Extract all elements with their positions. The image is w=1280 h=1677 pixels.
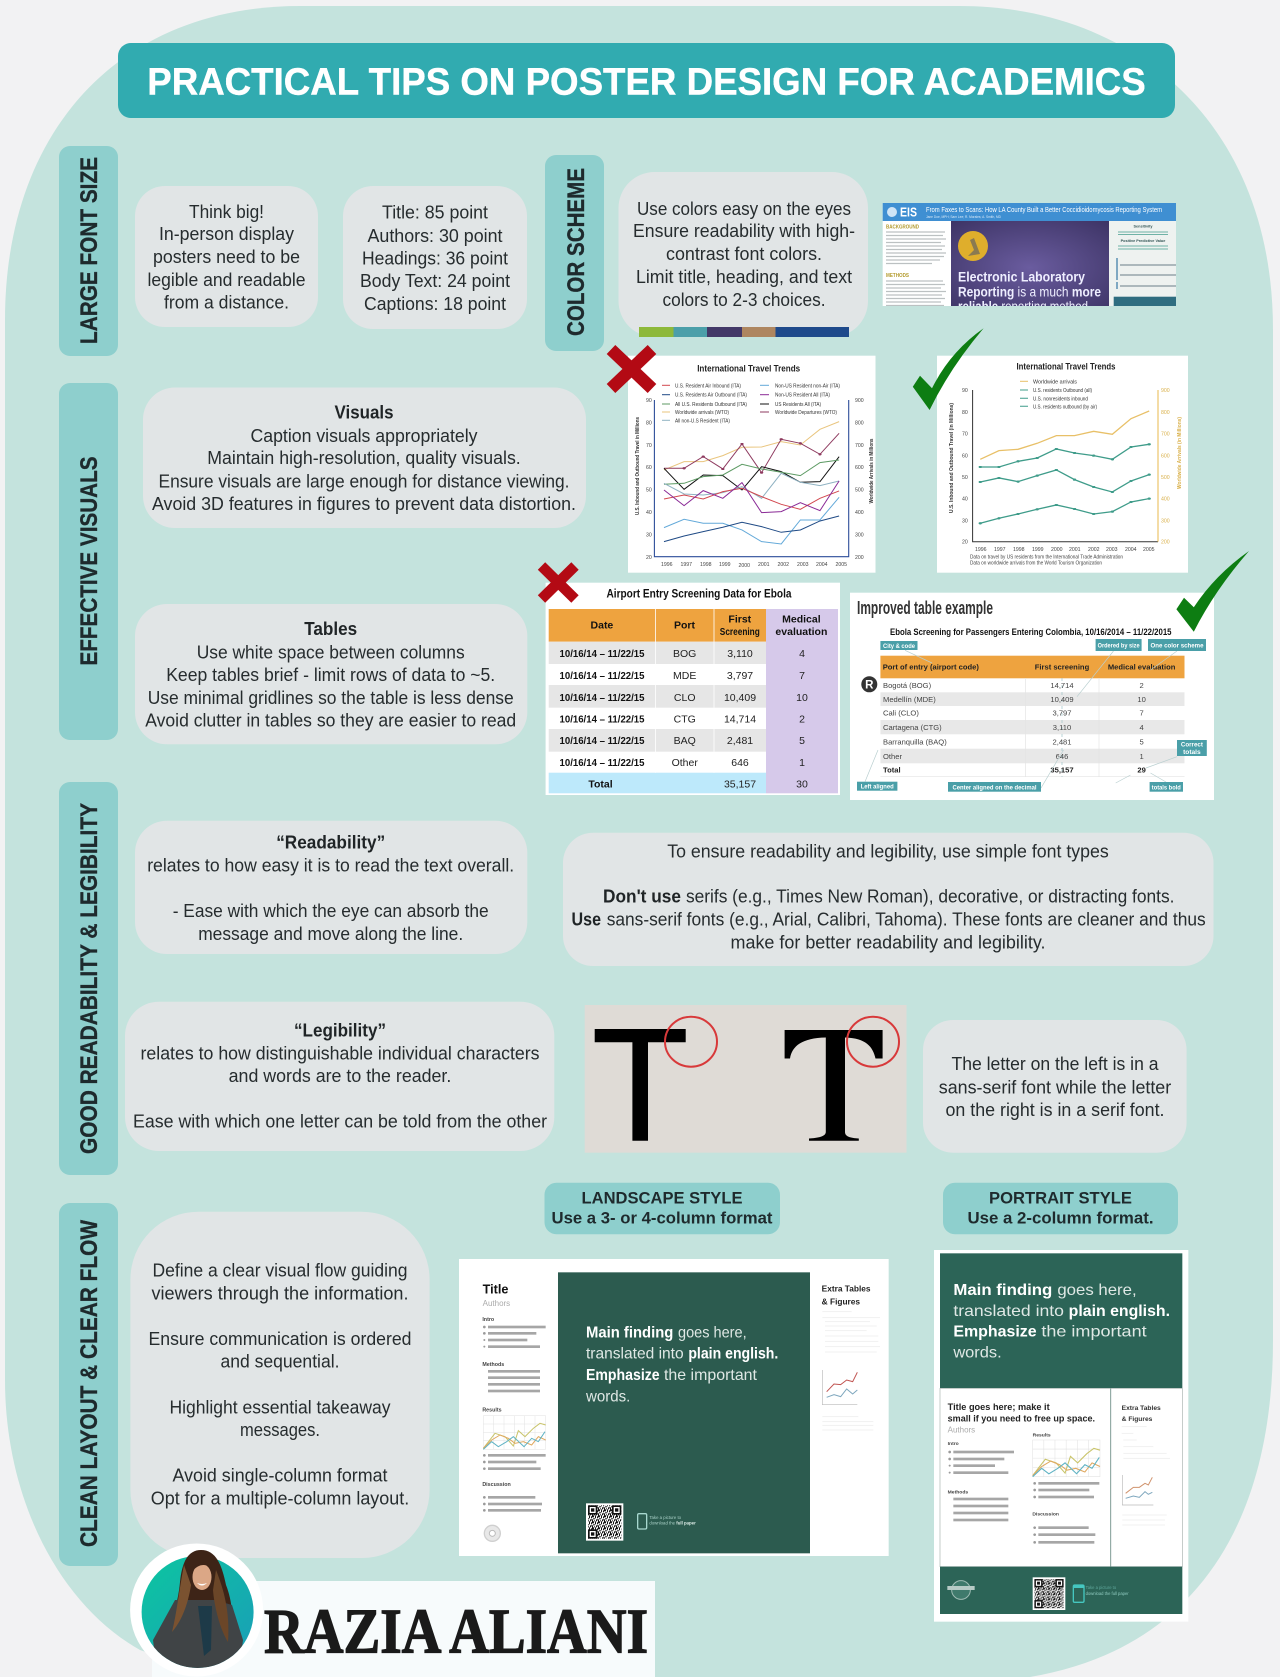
poster template: portrait [934,1250,1188,1622]
table: poor example: 3,797 [727,670,753,682]
table: improved example: Port of entry (airport code) [883,662,979,672]
panel: tables: Use white space between columns [197,641,465,662]
section tab: clean layout: CLEAN LAYOUT & CLEAR FLOW [76,1220,103,1547]
chart: cluttered line chart: 2001 [758,562,770,568]
chart: improved line chart: 2002 [1088,547,1100,553]
poster template: landscape: the important [664,1367,758,1384]
poster template: portrait: Intro [948,1441,959,1447]
panel: font advice: Don't use [603,886,681,907]
chart: improved line chart: 90 [962,388,968,394]
panel: tables [135,604,527,744]
panel: visuals: Ensure visuals are large enough for distance viewing. [158,470,570,492]
poster template: portrait: small if you need to free up space. [948,1413,1095,1423]
table: improved example: City & code [883,643,915,650]
panel: color advice: colors to 2-3 choices. [662,289,826,310]
table: poor example: 30 [796,778,808,790]
panel: point sizes: Headings: 36 point [362,247,509,268]
chart: cluttered line chart: 800 [855,420,864,426]
chart: cluttered line chart: U.S. Resident Air Inbound (ITA) [675,383,741,389]
panel: point sizes: Authors: 30 point [368,225,503,246]
poster template: portrait: & Figures [1122,1416,1153,1423]
chart: improved line chart: 600 [1161,453,1170,459]
panel: layout advice: Opt for a multiple-column layout. [151,1487,409,1508]
table: improved example: Center aligned on the decimal [952,784,1037,791]
chart: cluttered line chart: Worldwide arrivals (WTO) [675,410,729,416]
chart: cluttered line chart: 70 [646,443,652,449]
section tab: effective visuals: EFFECTIVE VISUALS [76,456,103,666]
chart: cluttered line chart: Non-US Resident All (ITA) [775,393,830,399]
chart: cluttered line chart: Non-US Resident non-Air (ITA) [775,383,840,389]
table: improved example: totals [1183,749,1201,756]
panel: letter caption [923,1020,1187,1153]
chart: cluttered line chart: 30 [646,532,652,538]
poster template: portrait: Discussion [1032,1511,1059,1517]
poster template: portrait: Take a picture to [1086,1585,1117,1590]
chart: improved line chart: 500 [1161,475,1170,481]
chart: improved line chart: Worldwide arrivals [1033,379,1078,385]
chart: cluttered line chart: All U.S. Residents Outbound (ITA) [675,402,747,408]
table: improved example: One color scheme [1150,642,1204,650]
table: improved example: 14,714 [1050,681,1074,690]
icon: green check [1176,551,1249,632]
panel: layout advice: Avoid single-column format [172,1465,388,1486]
panel: tables: Tables [304,618,357,639]
chart: cluttered line chart: 20 [646,555,652,561]
chart: improved line chart: 900 [1161,388,1170,394]
poster template: landscape: Title [483,1282,508,1296]
panel: font advice [563,833,1214,966]
example poster thumbnail: BACKGROUND [886,224,919,230]
table: improved example: 7 [1139,708,1144,718]
table: poor example: 14,714 [724,714,756,726]
poster template: landscape [459,1259,889,1556]
panel: layout advice: viewers through the information. [152,1282,408,1303]
table: poor example: 7 [799,670,805,682]
author portrait [130,1544,256,1668]
chart: improved line chart: U.S. nonresidents inbound [1033,396,1088,402]
panel: think big [135,186,318,327]
panel: tables: Avoid clutter in tables so they are easier to read [145,710,516,731]
poster template: landscape: Authors [483,1299,510,1308]
chart: cluttered line chart: 300 [855,532,864,538]
poster template: landscape: & Figures [822,1297,860,1307]
chart: improved line chart: 300 [1161,518,1170,524]
icon: green check [913,328,984,410]
chart: cluttered line chart: 600 [855,465,864,471]
panel: font advice: serifs (e.g., Times New Roman), decorative, or distracting fonts. [686,886,1174,907]
table: improved example: 3,110 [1053,723,1071,732]
example poster thumbnail [883,203,1176,314]
table: poor example: Other [672,757,698,769]
table: improved example: 1 [1139,752,1144,761]
panel: point sizes: Captions: 18 point [364,293,507,314]
panel: font advice: sans-serif fonts (e.g., Arial, Calibri, Tahoma). These fonts are cleaner and thus [607,908,1206,929]
panel: legibility: relates to how distinguishable individual characters [140,1042,540,1063]
table: improved example: Left aligned [861,784,894,791]
example poster thumbnail: EIS [900,204,917,220]
panel: readability: relates to how easy it is to read the text overall. [147,855,514,876]
poster template: portrait: the important [1041,1324,1147,1341]
panel: readability: message and move along the line. [198,923,463,944]
table: poor example: 2 [799,714,805,726]
table: improved example: First screening [1035,662,1090,672]
chart: improved line chart: 2004 [1125,547,1137,553]
chart: cluttered line chart: 2003 [797,562,809,568]
poster template: portrait: words. [952,1344,1002,1361]
poster template: landscape: Main finding [586,1324,673,1341]
poster template: landscape: Discussion [482,1482,511,1488]
chart: cluttered line chart: 2000 [738,563,750,569]
chart: cluttered line chart: 2002 [778,562,789,568]
table: improved example: Medellín (MDE) [883,695,936,704]
table: poor example [546,583,840,795]
panel: point sizes: Title: 85 point [382,202,489,222]
table: improved example: 646 [1056,752,1068,761]
table: improved example: Barranquilla (BAQ) [883,738,947,746]
poster template: landscape: Extra Tables [822,1284,871,1294]
table: improved example: Ordered by size [1098,642,1140,650]
table: poor example: 4 [799,648,805,660]
table: improved example: 29 [1137,766,1146,774]
section tab: large font size [59,146,118,356]
table: improved example: 2,481 [1052,738,1072,746]
table: poor example: 1 [799,757,805,769]
panel: think big: from a distance. [164,292,289,312]
panel: color advice: Limit title, heading, and text [636,266,853,287]
table: poor example: 10/16/14 – 11/22/15 [560,757,645,769]
table: poor example: Airport Entry Screening Data for Ebola [606,588,792,600]
section tab: clean layout [59,1203,118,1566]
panel: readability: - Ease with which the eye can absorb the [173,900,489,921]
chart: improved line chart: 60 [962,453,968,459]
chart: cluttered line chart [628,356,876,573]
poster template: landscape: Methods [482,1362,504,1368]
panel: legibility: and words are to the reader. [229,1065,451,1086]
panel: readability: “Readability” [276,831,385,852]
chart: cluttered line chart: 2004 [816,562,828,568]
panel: think big: posters need to be [153,246,300,267]
color palette strip [639,327,849,337]
section tab: effective visuals [59,383,118,740]
chart: cluttered line chart: 500 [855,488,864,494]
table: poor example: Medical [782,614,821,626]
section tab: color scheme [545,155,604,351]
table: poor example: 10/16/14 – 11/22/15 [560,648,645,660]
heading: portrait style [943,1183,1178,1234]
chart: improved line chart: 20 [962,540,968,546]
heading: landscape style: Use a 3- or 4-column format [552,1208,773,1227]
poster template: portrait: download the full paper [1086,1591,1129,1596]
table: poor example: BOG [673,648,696,660]
table: poor example: 10/16/14 – 11/22/15 [560,735,645,747]
poster template: portrait: Methods [948,1489,968,1495]
chart: cluttered line chart: 1996 [661,562,673,568]
chart: cluttered line chart: 900 [855,398,864,404]
example poster thumbnail: reliable reporting method [958,298,1088,314]
heading: landscape style: LANDSCAPE STYLE [582,1188,742,1207]
chart: cluttered line chart: All non-U.S Resident (ITA) [675,418,730,424]
panel: think big: legible and readable [148,269,306,290]
chart: improved line chart: 30 [962,518,968,524]
table: improved example: Bogotá (BOG) [883,681,932,690]
chart: improved line chart: 50 [962,475,968,481]
panel: font advice: To ensure readability and legibility, use simple font types [667,840,1109,861]
chart: improved line chart: 1999 [1032,547,1044,553]
chart: cluttered line chart: U.S. Residents Air Outbound (ITA) [675,393,747,399]
panel: point sizes: Body Text: 24 point [360,270,511,291]
chart: improved line chart: International Travel Trends [1016,362,1116,372]
heading: portrait style: Use a 2-column format. [968,1208,1154,1227]
panel: layout advice: and sequential. [220,1351,340,1372]
table: improved example: R [865,680,874,692]
table: poor example: BAQ [674,735,696,747]
chart: cluttered line chart: 50 [646,488,652,494]
table: improved example: Ebola Screening for Passengers Entering Colombia, 10/16/2014 – 11/22/2015 [890,627,1172,638]
table: poor example: Total [588,778,613,790]
chart: improved line chart: 2000 [1051,547,1063,553]
table: poor example: CTG [674,714,696,726]
table: improved example: 5 [1139,738,1144,746]
table: improved example: 2 [1139,681,1144,690]
table: poor example: 10/16/14 – 11/22/15 [560,670,645,682]
chart: cluttered line chart: 40 [646,510,652,516]
panel: readability [135,821,527,954]
chart: improved line chart: 2005 [1143,547,1155,553]
panel: think big: In-person display [159,223,295,244]
panel: layout advice: Highlight essential takeaway [170,1396,391,1417]
table: poor example: 3,110 [727,648,753,660]
example poster thumbnail: Electronic Laboratory [958,268,1085,284]
poster template: portrait: Authors [948,1426,975,1435]
panel: visuals [143,388,586,528]
chart: improved line chart: U.S. residents Outbound (all) [1033,388,1092,394]
table: poor example: 2,481 [727,735,753,747]
chart: cluttered line chart: Worldwide Departures (WTO) [775,410,837,416]
chart: cluttered line chart: International Travel Trends [697,364,800,374]
chart: cluttered line chart: US Residents All (ITA) [775,402,821,408]
table: improved example: 4 [1139,723,1144,732]
chart: improved line chart: 2003 [1106,547,1118,553]
poster template: portrait: Emphasize [953,1324,1037,1341]
table: poor example: Port [674,620,696,632]
table: improved example: 10,409 [1050,695,1074,704]
section tab: readability and legibility: GOOD READABILITY & LEGIBILITY [76,803,103,1154]
poster template: portrait: Main finding [953,1282,1052,1299]
chart: cluttered line chart: 1997 [680,562,692,568]
table: poor example: 35,157 [724,778,756,790]
example poster thumbnail: Reporting is a much more [958,284,1101,300]
panel: layout advice: messages. [240,1419,320,1440]
example poster thumbnail: METHODS [886,273,909,279]
table: poor example: Screening [720,626,760,638]
chart: improved line chart: 1996 [975,547,987,553]
poster template: landscape: Results [482,1408,502,1414]
example poster thumbnail: Positive Predictive Value [1121,239,1165,243]
chart: improved line chart: U.S. residents outbound (by air) [1033,404,1097,410]
table: poor example: 10/16/14 – 11/22/15 [560,714,645,726]
poster template: portrait: Results [1033,1433,1051,1439]
poster template: portrait: Extra Tables [1122,1405,1161,1412]
panel: color advice: Use colors easy on the eyes [637,198,851,219]
table: improved example: Improved table example [857,598,993,618]
poster template: landscape: Intro [482,1317,495,1323]
section tab: readability and legibility [59,782,118,1175]
panel: font advice: Use [572,908,601,929]
chart: cluttered line chart: 200 [855,555,864,561]
panel: color advice [618,172,868,337]
author name banner [152,1581,655,1677]
chart: cluttered line chart: 80 [646,420,652,426]
chart: improved line chart: 400 [1161,497,1170,503]
icon: red cross [542,566,575,599]
table: improved example: Medical evaluation [1108,662,1176,672]
poster template: landscape: translated into [586,1346,684,1363]
chart: improved line chart: 800 [1161,410,1170,416]
chart: cluttered line chart: 60 [646,465,652,471]
table: improved example: totals bold [1152,784,1181,791]
table: poor example: 646 [731,757,749,769]
panel: tables: Keep tables brief - limit rows of data to ~5. [166,664,495,685]
table: improved example: 35,157 [1050,766,1074,774]
table: improved example: Cali (CLO) [883,708,919,718]
chart: cluttered line chart: 1998 [700,562,712,568]
panel: layout advice: Define a clear visual flow guiding [152,1260,408,1281]
chart: improved line chart: 2001 [1069,547,1081,553]
table: poor example: Date [591,620,613,632]
panel: tables: Use minimal gridlines so the table is less dense [148,687,514,708]
panel: layout advice [130,1212,430,1558]
chart: improved line chart: Data on worldwide arrivals from the World Tourism Organization [970,560,1102,566]
poster template: landscape: Take a picture to [649,1515,682,1520]
panel: layout advice: Ensure communication is ordered [148,1328,412,1349]
panel: visuals: Visuals [334,402,394,422]
poster template: portrait: translated into [953,1303,1064,1320]
chart: cluttered line chart: Worldwide Arrivals in Millions [869,438,875,504]
chart: improved line chart: 200 [1161,540,1170,546]
section tab: color scheme: COLOR SCHEME [563,168,590,336]
chart: improved line chart: Data on travel by US residents from the International Trade Administration [970,554,1123,560]
poster template: landscape: Emphasize [586,1367,660,1384]
chart: improved line chart: Worldwide Arrivals (in Millions) [1177,417,1183,489]
heading: portrait style: PORTRAIT STYLE [989,1188,1132,1207]
chart: improved line chart: 700 [1161,432,1170,438]
chart: cluttered line chart: 400 [855,510,864,516]
chart: improved line chart: U.S. Inbound and Outbound Travel (in Millions) [949,403,955,513]
table: improved example: Total [883,766,901,774]
chart: cluttered line chart: 1999 [719,562,731,568]
example poster thumbnail: From Faxes to Scans: How LA County Built a Better Coccidioidomycosis Reporting System [926,205,1162,214]
panel: think big: Think big! [189,201,264,222]
table: poor example: 10 [796,692,808,704]
panel: letter caption: sans-serif font while the letter [939,1076,1171,1097]
icon: red cross [611,350,652,388]
table: improved example: 3,797 [1052,708,1072,718]
panel: color advice: contrast font colors. [666,243,822,264]
table: improved example [850,593,1214,800]
table: poor example: evaluation [775,626,827,638]
chart: cluttered line chart: U.S. Inbound and Outbound Travel in Millions [635,417,641,515]
chart: cluttered line chart: 90 [646,398,652,404]
chart: improved line chart: 40 [962,497,968,503]
panel: legibility: “Legibility” [294,1020,386,1041]
panel: visuals: Maintain high-resolution, quality visuals. [207,447,521,468]
chart: cluttered line chart: 700 [855,443,864,449]
panel: visuals: Avoid 3D features in figures to prevent data distortion. [152,493,576,514]
table: poor example: First [728,614,752,626]
chart: improved line chart: 1997 [994,547,1006,553]
table: poor example: 10,409 [724,692,756,704]
panel: color advice: Ensure readability with high- [633,220,855,241]
chart: improved line chart: 70 [962,432,968,438]
table: improved example: Other [883,752,902,761]
chart: improved line chart: 1998 [1013,547,1025,553]
poster template: landscape: words. [585,1388,630,1405]
chart: cluttered line chart: 2005 [836,562,847,568]
table: poor example: 5 [799,735,805,747]
panel: visuals: Caption visuals appropriately [250,425,478,446]
poster template: landscape: plain english. [688,1346,778,1363]
table: improved example: Cartagena (CTG) [883,723,942,732]
panel: letter caption: The letter on the left is in a [952,1053,1159,1074]
poster template: portrait: Title goes here; make it [948,1402,1050,1412]
poster template: landscape: download the full paper [649,1520,696,1525]
panel: point sizes [343,186,527,329]
table: poor example: MDE [673,670,696,682]
panel: letter caption: on the right is in a serif font. [946,1099,1164,1120]
poster template: portrait: plain english. [1069,1303,1170,1320]
panel: legibility: Ease with which one letter can be told from the other [133,1110,547,1131]
panel: font advice: make for better readability and legibility. [730,931,1046,952]
panel: legibility [125,1002,554,1151]
heading: landscape style [544,1183,780,1234]
table: poor example: 10/16/14 – 11/22/15 [560,692,645,704]
poster template: portrait: goes here, [1057,1282,1137,1299]
title banner: PRACTICAL TIPS ON POSTER DESIGN FOR ACADEMICS [147,62,1146,104]
example poster thumbnail: Jane Doe, MPH; Sam Lee; R. Morales; A. Smith, MD [926,215,1001,219]
chart: improved line chart [937,356,1188,573]
section tab: large font size: LARGE FONT SIZE [76,157,103,344]
table: improved example: 10 [1137,695,1146,704]
title banner [118,43,1175,118]
table: poor example: CLO [674,692,695,704]
table: improved example: Correct [1181,742,1204,748]
example poster thumbnail: Sensitivity [1134,224,1153,228]
figure: sans and serif letter T comparison [585,1005,906,1153]
chart: improved line chart: 80 [962,410,968,416]
author name banner: RAZIA ALIANI [264,1597,648,1667]
poster template: landscape: goes here, [678,1324,747,1341]
